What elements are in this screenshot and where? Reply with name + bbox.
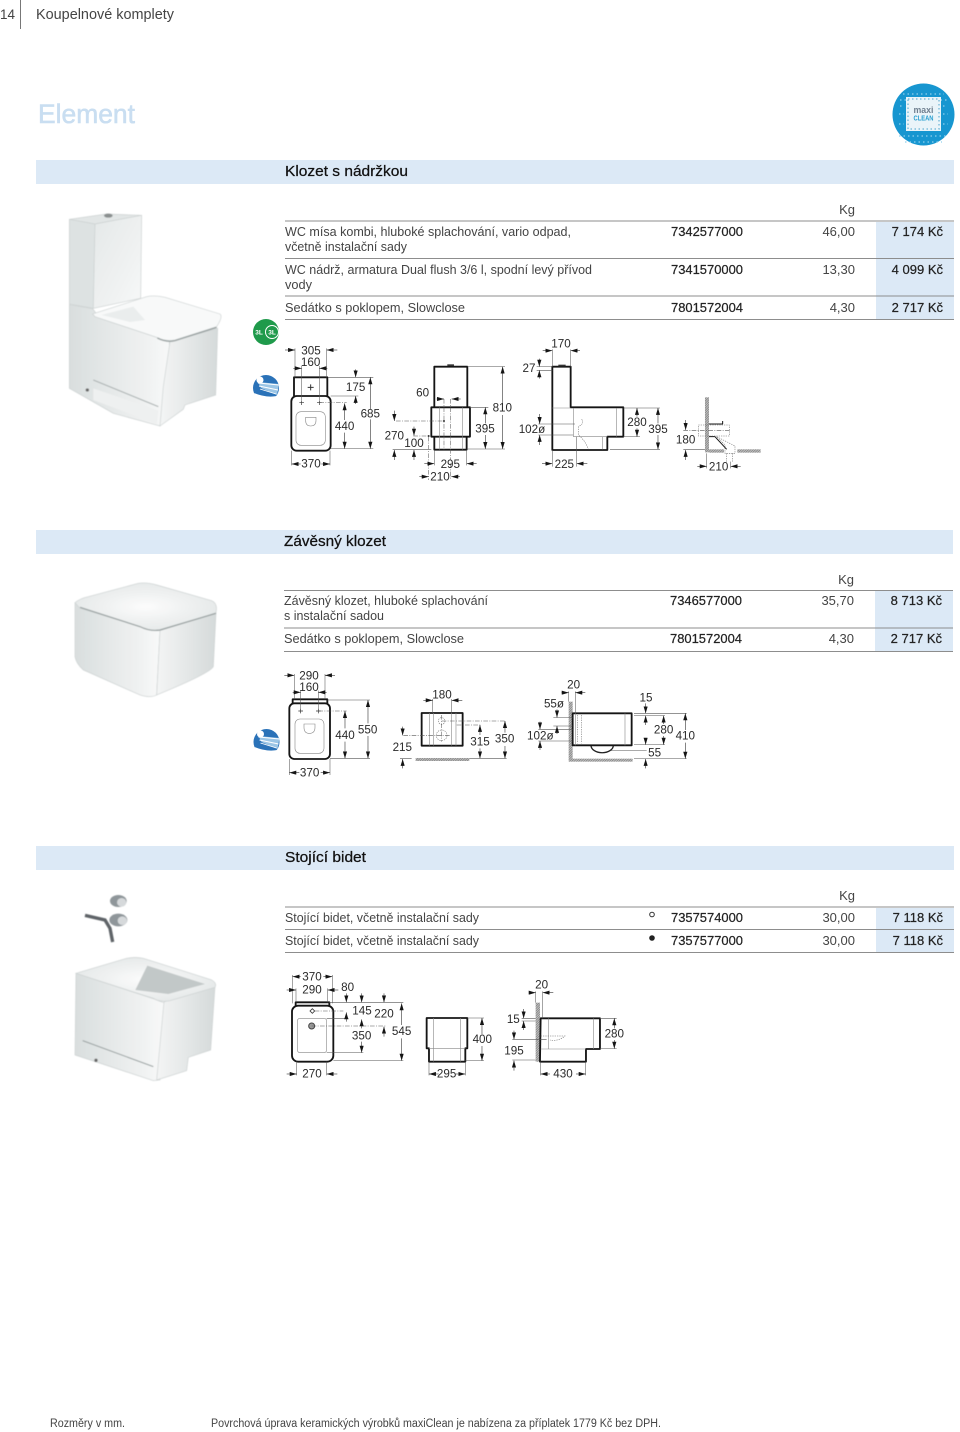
table: Stojící bidet: Stojící bidet, včetně instalační sady (285, 933, 479, 948)
diagram: toilet front and rear views: 370 (301, 458, 321, 471)
table: Klozet s nádržkou: 2 717 Kč (892, 300, 943, 315)
diagram: bidet views (287, 971, 625, 1081)
diagram: wall-hung toilet side view: 280 (654, 723, 674, 736)
table: Klozet s nádržkou: Kg (839, 202, 855, 217)
icon: dual flush 3L/6L: 3L (255, 330, 263, 336)
diagram: wall-hung toilet front and rear views: 440 (335, 729, 355, 742)
diagram: bidet views: 295 (437, 1068, 456, 1081)
section heading: Stojící bidet: Stojící bidet (285, 849, 367, 866)
diagram: bidet views: 290 (302, 984, 322, 997)
table: Klozet s nádržkou: 13,30 (822, 262, 855, 277)
icon: maxiClean badge: maxi (914, 105, 934, 116)
table: Klozet s nádržkou: 4,30 (830, 300, 855, 315)
icon: rinse (253, 375, 279, 402)
table: Klozet s nádržkou: 46,00 (822, 224, 855, 239)
diagram: toilet front and rear views: 810 (493, 402, 513, 415)
photo: wall-mounted faucet (85, 895, 127, 942)
title: Element (38, 99, 135, 129)
table: Závěsný klozet: 4,30 (829, 631, 854, 646)
table: Stojící bidet: 7 118 Kč (893, 910, 943, 925)
diagram: toilet front and rear views: 295 (441, 458, 460, 471)
diagram: bidet views: 80 (341, 981, 355, 994)
photo: close-coupled toilet (69, 214, 221, 426)
table: Závěsný klozet: Sedátko s poklopem, Slowclose (284, 631, 464, 646)
diagram: toilet front and rear views: 175 (346, 381, 365, 394)
table: Závěsný klozet: 2 717 Kč (891, 631, 942, 646)
table: Klozet s nádržkou: 7342577000 (671, 224, 743, 239)
table: Klozet s nádržkou: 7801572004 (671, 300, 743, 315)
table: Stojící bidet: 30,00 (822, 910, 855, 925)
diagram: bidet views: 195 (504, 1045, 524, 1058)
diagram: wall-hung toilet front and rear views: 215 (393, 741, 412, 754)
diagram: wall-hung toilet side view: 20 (567, 679, 581, 692)
table: Závěsný klozet (284, 572, 953, 652)
table: Závěsný klozet: 7801572004 (670, 631, 742, 646)
table: Závěsný klozet: Závěsný klozet, hluboké splachování (284, 593, 488, 608)
table: Stojící bidet (285, 888, 954, 953)
diagram: toilet side and installation views: 280 (627, 416, 647, 429)
table: Klozet s nádržkou: 7 174 Kč (892, 224, 943, 239)
table: Klozet s nádržkou: WC nádrž, armatura Dual flush 3/6 l, spodní levý přívod (285, 262, 592, 277)
table: Stojící bidet: Kg (839, 888, 855, 903)
diagram: wall-hung toilet front and rear views (284, 670, 515, 780)
diagram: wall-hung toilet front and rear views: 350 (495, 733, 515, 746)
section heading: Klozet s nádržkou: Klozet s nádržkou (285, 163, 408, 180)
diagram: bidet views: 280 (605, 1028, 625, 1041)
diagram: bidet views: 15 (507, 1013, 520, 1026)
diagram: toilet side and installation views (519, 337, 761, 473)
diagram: bidet views: 145 (352, 1005, 372, 1018)
diagram: toilet front and rear views: 270 (385, 429, 405, 442)
section heading: Závěsný klozet: Závěsný klozet (284, 533, 387, 550)
diagram: wall-hung toilet side view (527, 679, 696, 768)
diagram: toilet side and installation views: 210 (709, 460, 729, 473)
section band: Klozet s nádržkou (36, 160, 954, 184)
table: Stojící bidet: 7357577000 (671, 933, 743, 948)
diagram: bidet views: 270 (302, 1068, 322, 1081)
table: Klozet s nádržkou: WC mísa kombi, hluboké splachování, vario odpad, (285, 224, 571, 239)
page number: 14 (0, 6, 15, 22)
diagram: toilet front and rear views: 100 (404, 437, 424, 450)
table: Stojící bidet: 7 118 Kč (893, 933, 943, 948)
diagram: wall-hung toilet front and rear views: 160 (299, 681, 319, 694)
diagram: wall-hung toilet side view: 55ø (544, 697, 564, 710)
diagram: toilet front and rear views: 60 (416, 387, 430, 400)
section band: Závěsný klozet (36, 530, 953, 554)
table: Závěsný klozet: s instalační sadou (284, 608, 384, 623)
table: Klozet s nádržkou: 4 099 Kč (892, 262, 943, 277)
photo: wall-hung toilet (75, 583, 216, 697)
footnote: dimensions: Rozměry v mm. (50, 1418, 125, 1430)
diagram: bidet views: 370 (302, 971, 322, 984)
diagram: toilet front and rear views: 305 (301, 344, 321, 357)
diagram: toilet side and installation views: 27 (523, 362, 535, 375)
diagram: bidet views: 430 (553, 1068, 573, 1081)
icon: maxiClean badge: CLEAN (914, 114, 934, 122)
diagram: toilet front and rear views (285, 344, 513, 484)
diagram: wall-hung toilet side view: 410 (676, 730, 696, 743)
running header: Koupelnové komplety (36, 6, 174, 23)
diagram: bidet views: 20 (535, 979, 549, 992)
diagram: bidet views: 220 (374, 1008, 394, 1021)
table: Závěsný klozet: 35,70 (821, 593, 854, 608)
table: Klozet s nádržkou: včetně instalační sady (285, 239, 407, 254)
table: Stojící bidet: 7357574000 (671, 910, 743, 925)
table: Klozet s nádržkou: 7341570000 (671, 262, 743, 277)
table: Klozet s nádržkou (285, 202, 954, 320)
table: Závěsný klozet: Kg (838, 572, 854, 587)
diagram: wall-hung toilet front and rear views: 290 (299, 670, 319, 683)
section band: Stojící bidet (36, 846, 954, 870)
diagram: wall-hung toilet side view: 15 (640, 692, 652, 705)
diagram: wall-hung toilet side view: 102ø (527, 730, 554, 743)
table: Klozet s nádržkou: vody (285, 277, 312, 292)
table: Závěsný klozet: 7346577000 (670, 593, 742, 608)
icon: dual flush 3L/6L: 3L (268, 330, 276, 336)
table: Stojící bidet: 30,00 (822, 933, 855, 948)
diagram: toilet side and installation views: 180 (676, 434, 696, 447)
icon: maxiClean badge (892, 84, 954, 146)
diagram: toilet side and installation views: 395 (648, 423, 668, 436)
diagram: wall-hung toilet front and rear views: 315 (470, 735, 490, 748)
table: Klozet s nádržkou: Sedátko s poklopem, Slowclose (285, 300, 465, 315)
diagram: wall-hung toilet side view: 55 (648, 747, 661, 760)
icon: dual flush 3L/6L (253, 319, 279, 345)
diagram: toilet front and rear views: 395 (475, 422, 495, 435)
diagram: toilet front and rear views: 160 (301, 356, 321, 369)
photo: bidet (75, 957, 216, 1081)
diagram: bidet views: 400 (473, 1033, 493, 1046)
diagram: toilet front and rear views: 440 (335, 420, 355, 433)
icon: rinse (254, 729, 280, 756)
table: Závěsný klozet: 8 713 Kč (891, 593, 942, 608)
footnote: maxiClean surcharge: Povrchová úprava keramických výrobků maxiClean je nabízena za příplatek 1779 Kč bez DPH. (211, 1418, 661, 1430)
diagram: bidet views: 350 (352, 1029, 372, 1042)
diagram: toilet front and rear views: 210 (430, 471, 450, 484)
diagram: toilet front and rear views: 685 (361, 408, 380, 421)
diagram: wall-hung toilet front and rear views: 370 (300, 767, 320, 780)
diagram: toilet side and installation views: 225 (555, 458, 574, 471)
diagram: wall-hung toilet front and rear views: 550 (358, 723, 378, 736)
table: Stojící bidet: Stojící bidet, včetně instalační sady (285, 910, 479, 925)
diagram: toilet side and installation views: 170 (551, 337, 571, 350)
diagram: wall-hung toilet front and rear views: 180 (432, 688, 452, 701)
diagram: bidet views: 545 (392, 1025, 411, 1038)
diagram: toilet side and installation views: 102ø (519, 423, 545, 436)
